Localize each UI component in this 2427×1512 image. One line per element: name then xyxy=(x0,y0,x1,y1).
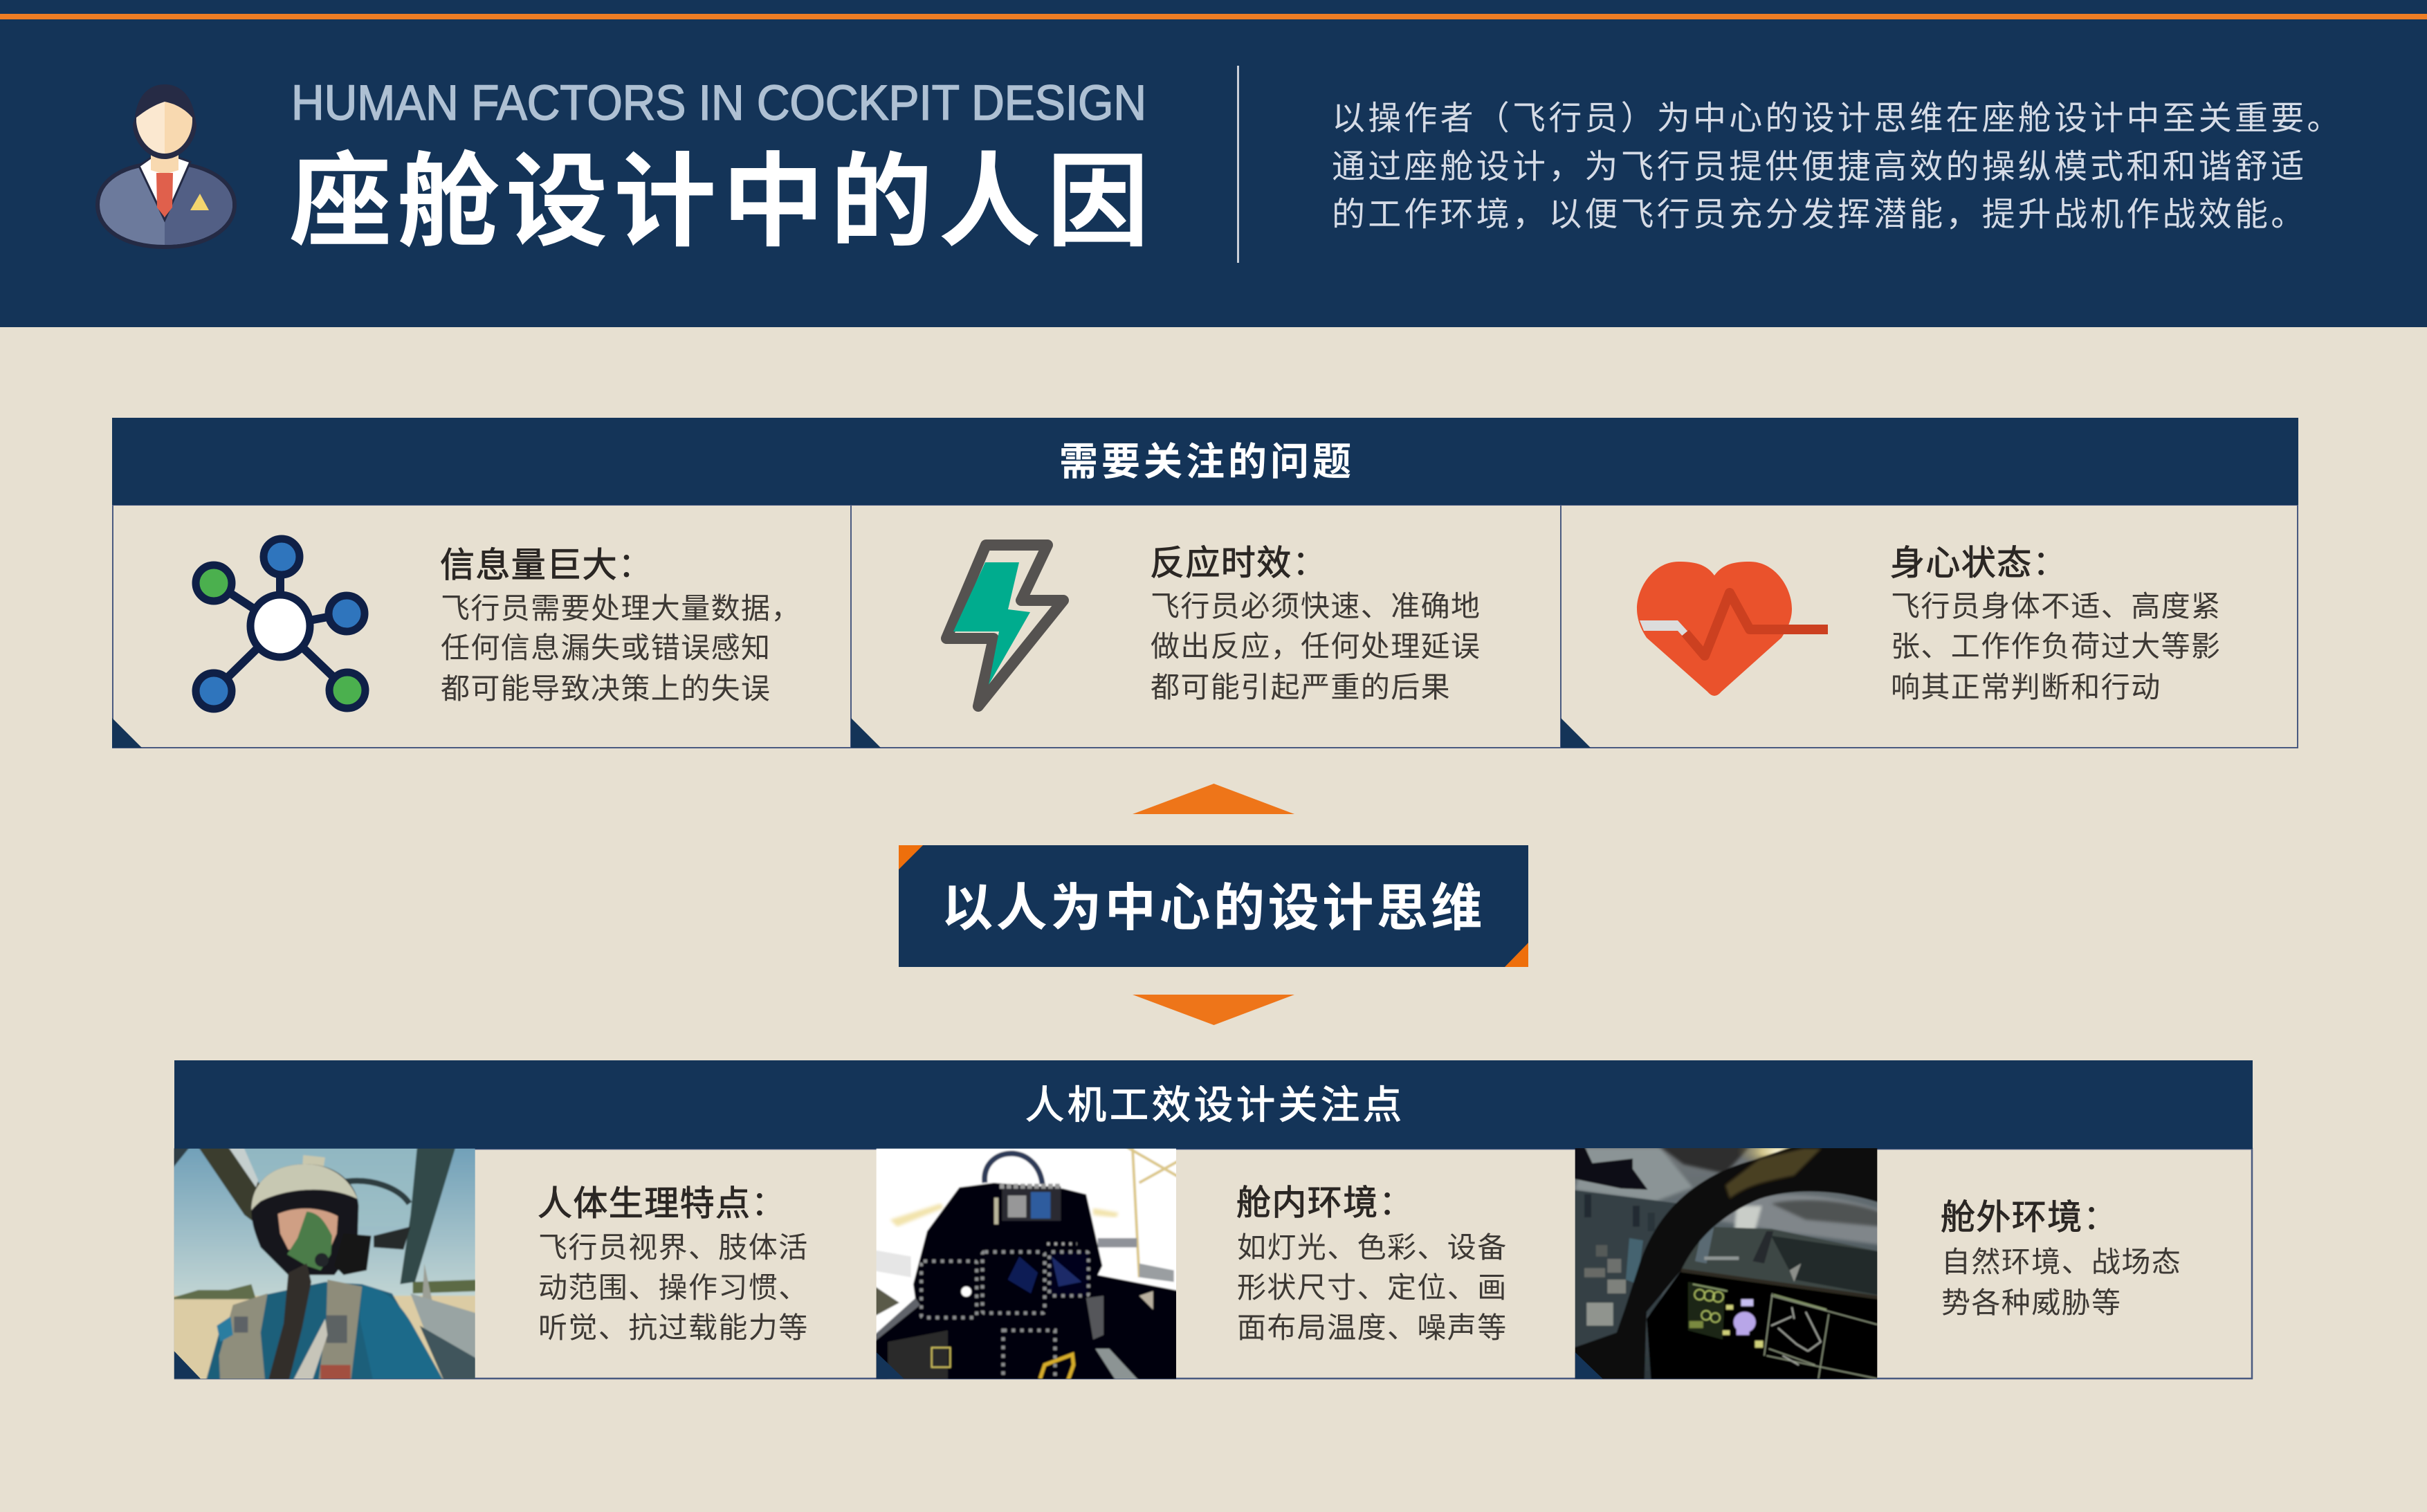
panel heading: 需要关注的问题 xyxy=(1059,440,1355,483)
text: human physiology: 听觉、抗过载能力等 xyxy=(538,1311,809,1344)
text: physical and mental state: 响其正常判断和行动 xyxy=(1891,671,2161,703)
arrow: up xyxy=(1133,784,1294,814)
text: information volume: 都可能导致决策上的失误 xyxy=(441,672,771,705)
intro paragraph: 通过座舱设计，为飞行员提供便捷高效的操纵模式和和谐舒适 xyxy=(1332,149,2307,185)
icon: heart with pulse xyxy=(1637,562,1828,696)
icon: pilot in suit xyxy=(98,84,235,247)
header banner xyxy=(0,0,2427,327)
text: cabin environment xyxy=(1236,1183,1508,1344)
photo: fighter instrument panel xyxy=(872,1143,1181,1390)
photo: pilot in oxygen mask xyxy=(168,1143,479,1383)
text: reaction time: 都可能引起严重的后果 xyxy=(1151,671,1451,703)
text: cabin environment: 面布局温度、噪声等 xyxy=(1237,1311,1508,1344)
centre banner xyxy=(899,845,1528,967)
text: reaction time: 飞行员必须快速、准确地 xyxy=(1151,590,1481,623)
intro paragraph xyxy=(1332,100,2343,233)
text: reaction time xyxy=(1150,544,1481,703)
text: external environment: 舱外环境： xyxy=(1941,1198,2118,1237)
panel heading: 人机工效设计关注点 xyxy=(1025,1083,1405,1127)
text: physical and mental state: 飞行员身体不适、高度紧 xyxy=(1891,590,2221,623)
text: physical and mental state: 张、工作作负荷过大等影 xyxy=(1891,630,2221,663)
arrow: down xyxy=(1133,995,1294,1025)
photo: view from cockpit over city xyxy=(1570,1136,1882,1383)
text: cabin environment: 形状尺寸、定位、画 xyxy=(1237,1271,1508,1304)
english subtitle: HUMAN FACTORS IN COCKPIT DESIGN xyxy=(291,76,1146,131)
text: human physiology xyxy=(538,1184,809,1344)
centre banner text: 以人为中心的设计思维 xyxy=(942,879,1485,937)
main title: 座舱设计中的人因 xyxy=(289,145,1155,259)
text: cabin environment: 舱内环境： xyxy=(1236,1183,1414,1222)
text: reaction time: 做出反应，任何处理延误 xyxy=(1151,630,1481,663)
text: physical and mental state xyxy=(1890,544,2221,703)
icon: information network xyxy=(196,539,365,709)
text: human physiology: 人体生理特点： xyxy=(538,1184,787,1223)
intro paragraph: 以操作者（飞行员）为中心的设计思维在座舱设计中至关重要。 xyxy=(1332,100,2343,137)
text: cabin environment: 如灯光、色彩、设备 xyxy=(1237,1231,1508,1264)
text: information volume: 信息量巨大： xyxy=(440,546,653,584)
text: external environment: 自然环境、战场态 xyxy=(1941,1246,2181,1278)
text: information volume: 飞行员需要处理大量数据， xyxy=(441,592,801,625)
text: human physiology: 动范围、操作习惯、 xyxy=(538,1271,809,1304)
text: external environment: 势各种威胁等 xyxy=(1941,1287,2121,1319)
panel: ergonomic design focus xyxy=(168,1060,2253,1390)
panel: issues needing attention xyxy=(112,418,2298,748)
text: reaction time: 反应时效： xyxy=(1150,544,1328,582)
text: physical and mental state: 身心状态： xyxy=(1890,544,2068,582)
text: external environment xyxy=(1941,1198,2181,1319)
header divider xyxy=(1237,66,1239,263)
intro paragraph: 的工作环境，以便飞行员充分发挥潜能，提升战机作战效能。 xyxy=(1332,196,2307,233)
text: information volume: 任何信息漏失或错误感知 xyxy=(441,631,771,664)
text: human physiology: 飞行员视界、肢体活 xyxy=(538,1231,809,1264)
icon: lightning bolt xyxy=(946,545,1063,706)
text: information volume xyxy=(440,546,801,705)
